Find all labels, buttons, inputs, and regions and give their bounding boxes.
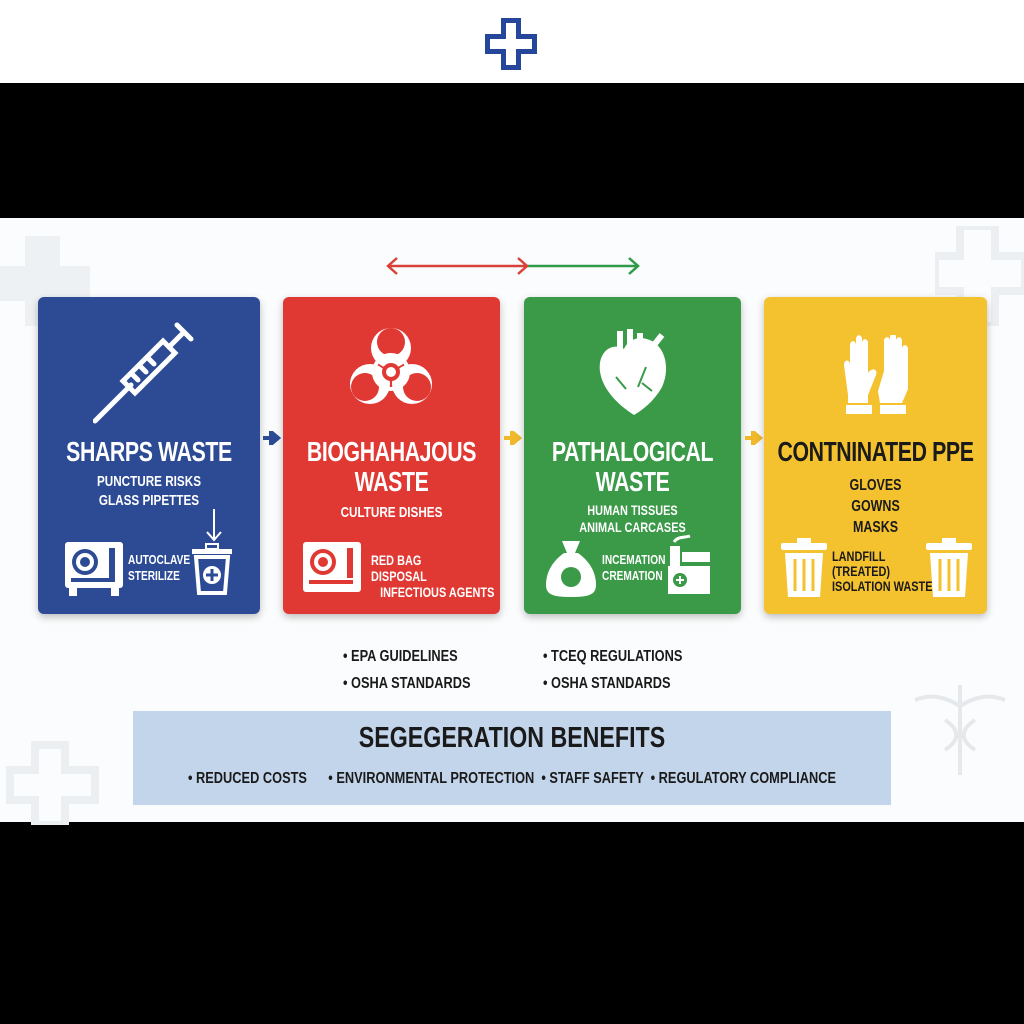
icon: autoclave: [65, 542, 123, 596]
heading: CONTNINATED PPE: [777, 436, 974, 467]
text: regulations left: • EPA GUIDELINES: [343, 648, 458, 665]
text: GLASS PIPETTES: [99, 492, 199, 509]
text: ANIMAL CARCASES: [579, 519, 686, 535]
panel: segregation benefits: [133, 711, 891, 805]
panel: biohazardous waste: [283, 297, 500, 614]
text: CULTURE DISHES: [341, 504, 442, 521]
arrow: blue: [263, 431, 281, 445]
panel: pathological waste: [524, 297, 741, 614]
text: autoclave: AUTOCLAVE: [128, 552, 190, 567]
icon: syringe: [93, 322, 194, 424]
text: GLOVES: [849, 477, 902, 494]
text: regulations right: [543, 648, 682, 692]
text: LANDFILL: [832, 548, 885, 564]
text: INCEMATION: [602, 552, 665, 567]
arrow: yellow 1: [504, 431, 522, 445]
heading: BIOGHAHAJOUS: [307, 436, 476, 467]
heading: [307, 436, 476, 497]
heading: SEGEGERATION BENEFITS: [359, 722, 665, 754]
text: autoclave: STERILIZE: [128, 568, 180, 583]
text: regulations right: • TCEQ REGULATIONS: [543, 648, 682, 665]
text: regulations right: • OSHA STANDARDS: [543, 675, 671, 692]
text: autoclave: [128, 552, 190, 583]
icon: header medical cross: [485, 18, 537, 70]
text: PUNCTURE RISKS: [97, 473, 201, 490]
text: [97, 473, 201, 509]
heading: [552, 436, 713, 497]
text: [371, 552, 494, 600]
icon: autoclave: [303, 542, 361, 592]
text: [832, 548, 933, 594]
icon: bin right: [926, 538, 972, 597]
text: [602, 552, 665, 583]
panel: sharps waste: [38, 297, 260, 614]
arrows: top connector: [386, 257, 640, 275]
icon: biohazard: [350, 328, 432, 404]
heading: PATHALOGICAL: [552, 436, 713, 467]
text: [849, 477, 902, 536]
heading: WASTE: [355, 466, 428, 497]
icon: bin with arrow: [192, 509, 232, 595]
text: INFECTIOUS AGENTS: [380, 584, 494, 600]
text: [579, 502, 686, 535]
text: GOWNS: [851, 498, 900, 515]
icon: caduceus watermark: [914, 685, 1006, 775]
decorative crosses: [0, 236, 90, 326]
text: DISPOSAL: [371, 568, 427, 584]
text: regulations left: [343, 648, 471, 692]
top white header: [0, 0, 1024, 83]
text: ISOLATION WASTE: [832, 578, 933, 594]
text: HUMAN TISSUES: [587, 502, 678, 518]
bullets: • REDUCED COSTS • ENVIRONMENTAL PROTECTION • STAFF SAFETY • REGULATORY COMPLIANCE: [188, 770, 836, 787]
text: MASKS: [853, 519, 898, 536]
icon: heart: [600, 329, 666, 415]
icon: incinerator: [668, 534, 710, 594]
icon: bin left: [781, 538, 827, 597]
arrow: yellow 2: [745, 431, 763, 445]
main white area: [0, 218, 1024, 822]
text: (TREATED): [832, 563, 890, 579]
text: regulations left: • OSHA STANDARDS: [343, 675, 471, 692]
text: RED BAG: [371, 552, 421, 568]
icon: gloves: [844, 335, 908, 414]
icon: bag: [546, 541, 596, 597]
text: CREMATION: [602, 568, 663, 583]
heading: WASTE: [596, 466, 669, 497]
heading: SHARPS WASTE: [66, 436, 232, 467]
panel: contaminated PPE: [764, 297, 987, 614]
